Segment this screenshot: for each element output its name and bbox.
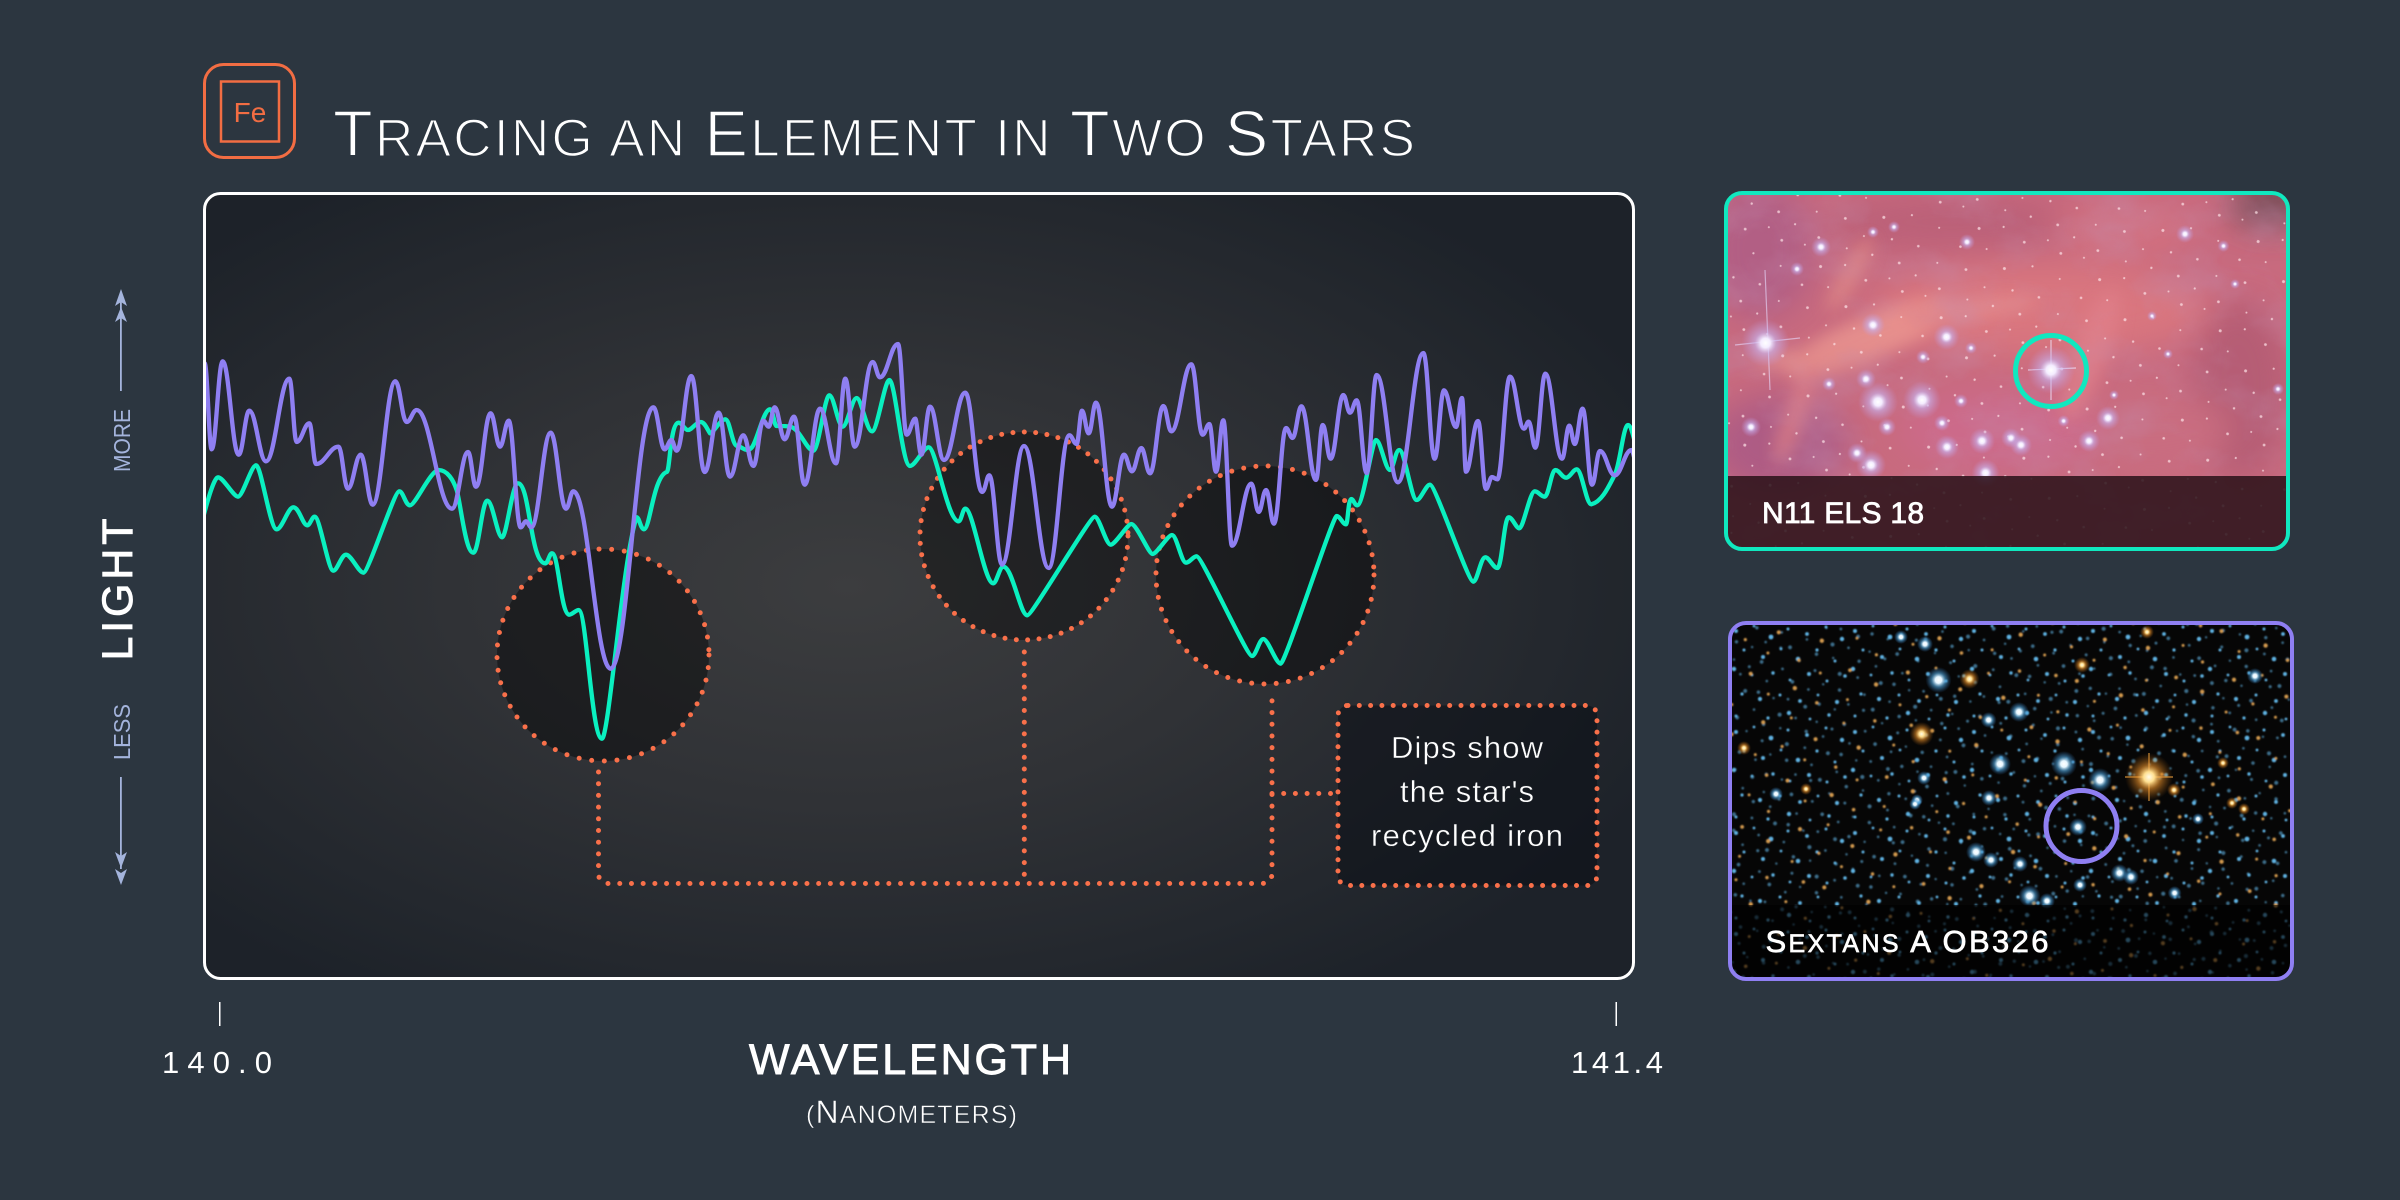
- arrow: more light: [115, 289, 127, 391]
- stars: [1737, 625, 2263, 909]
- panel: Sextans A OB326 image: [1730, 623, 2292, 979]
- x axis: wavelength: [162, 1002, 1663, 1130]
- caption band: [1730, 905, 2292, 979]
- image border: [1730, 623, 2292, 979]
- highlight circle: second dip: [920, 432, 1128, 640]
- label: more: MORE: [109, 409, 135, 472]
- line: N11 ELS 18 spectrum (teal): [203, 380, 1637, 739]
- line: Sextans A OB326 spectrum (purple): [205, 344, 1637, 669]
- image: star field: [1730, 623, 2292, 979]
- label: nanometers: (NANOMETERS): [806, 1094, 1017, 1130]
- tick: 140.0: [219, 1002, 220, 1026]
- panel: spectrum chart: [203, 194, 1637, 978]
- y axis: light: [94, 289, 142, 885]
- title: TRACING AN ELEMENT IN TWO STARS: [333, 97, 1415, 170]
- stars: [1735, 221, 2284, 487]
- label: N11 ELS 18: N11 ELS 18: [1762, 497, 1924, 530]
- label: 140.0: 140.0: [162, 1045, 272, 1080]
- label: light: LIGHT: [94, 518, 142, 660]
- connector lines: [598, 652, 1338, 884]
- image border: [1726, 193, 2288, 549]
- callout: recycled iron: Dips show: [1391, 730, 1544, 765]
- image: pink nebula: [1728, 195, 2286, 547]
- icon: iron element tile: [204, 64, 294, 158]
- tick: 141.4: [1616, 1002, 1617, 1026]
- label: less: LESS: [109, 704, 135, 760]
- callout: recycled iron: recycled iron: [1371, 818, 1563, 853]
- spectrum lines: [203, 344, 1637, 739]
- panel: N11 ELS 18 image: [1705, 180, 2314, 549]
- callout: recycled iron: [1338, 706, 1597, 886]
- callout: recycled iron: the star's: [1400, 774, 1534, 809]
- chart background: [204, 194, 1634, 978]
- caption band: [1726, 476, 2288, 549]
- label: Sextans A OB326: SEXTANS A OB326: [1766, 924, 2048, 959]
- marker: star circle: [2046, 790, 2117, 862]
- highlight circle: third dip: [1156, 466, 1374, 684]
- label: wavelength: WAVELENGTH: [749, 1036, 1071, 1084]
- label: 141.4: 141.4: [1571, 1045, 1663, 1080]
- icon: iron element tile: Fe: [234, 97, 266, 128]
- highlight circle: first dip: [497, 549, 709, 761]
- marker: star circle: [2016, 336, 2086, 406]
- chart border: [204, 194, 1634, 978]
- arrow: less light: [115, 777, 127, 885]
